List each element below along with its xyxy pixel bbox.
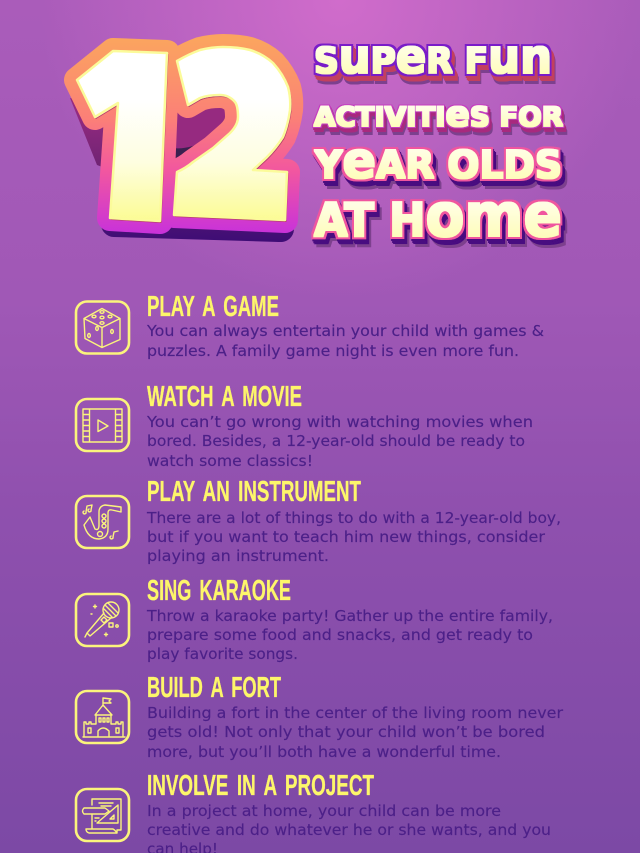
heading: BUILD A FORT xyxy=(147,672,281,704)
text block: puzzles. A family game night is even more fun. xyxy=(147,342,519,360)
text block: more, but you’ll both have a wonderful time. xyxy=(147,743,501,761)
text block: You can’t go wrong with watching movies when xyxy=(146,413,533,431)
icon: microphone xyxy=(76,594,129,646)
big number 12 xyxy=(70,47,291,229)
text block: prepare some food and snacks, and get ready to xyxy=(147,626,533,644)
heading: PLAY A GAME xyxy=(147,291,279,323)
title: super fun: SuPeR Fun xyxy=(314,30,552,85)
heading: INVOLVE IN A PROJECT xyxy=(147,770,374,802)
text block: play favorite songs. xyxy=(147,645,298,663)
icon: film xyxy=(76,399,129,451)
activity: involve in a project xyxy=(76,770,551,853)
heading: PLAY AN INSTRUMENT xyxy=(147,476,361,508)
icon: castle xyxy=(76,691,129,743)
text block: creative and do whatever he or she wants, and you xyxy=(147,821,551,839)
text block: but if you want to teach him new things, consider xyxy=(147,528,546,546)
activity: play an instrument xyxy=(76,476,561,565)
title: at home: AT Home xyxy=(314,181,562,251)
text block xyxy=(146,322,544,360)
activity: sing karaoke xyxy=(76,575,553,663)
text block: There are a lot of things to do with a 12-year-old boy, xyxy=(146,509,561,527)
text block: You can always entertain your child with games & xyxy=(146,322,544,340)
text block xyxy=(146,509,561,565)
text block xyxy=(146,413,533,470)
heading: SING KARAOKE xyxy=(147,575,291,607)
activity: build a fort xyxy=(76,672,564,761)
title: activities for: ACTIVITIeS FOR xyxy=(314,95,563,135)
icon: dice xyxy=(76,302,129,354)
text block xyxy=(147,802,551,853)
heading: WATCH A MOVIE xyxy=(147,381,302,413)
text block xyxy=(147,704,564,761)
text block: Throw a karaoke party! Gather up the entire family, xyxy=(146,607,553,625)
title: year olds: YeAR OLDS xyxy=(314,132,562,190)
text block: gets old! Not only that your child won’t be bored xyxy=(147,723,545,741)
text block: bored. Besides, a 12-year-old should be ready to xyxy=(147,432,525,450)
text block: Building a fort in the center of the living room never xyxy=(147,704,564,722)
activity: play a game xyxy=(76,291,544,360)
icon: saxophone xyxy=(76,496,129,548)
activity: watch a movie xyxy=(76,381,533,470)
icon: blueprint xyxy=(76,789,129,841)
text block: In a project at home, your child can be more xyxy=(147,802,501,820)
text block xyxy=(146,607,553,663)
text block: watch some classics! xyxy=(147,452,313,470)
text block: playing an instrument. xyxy=(147,547,329,565)
